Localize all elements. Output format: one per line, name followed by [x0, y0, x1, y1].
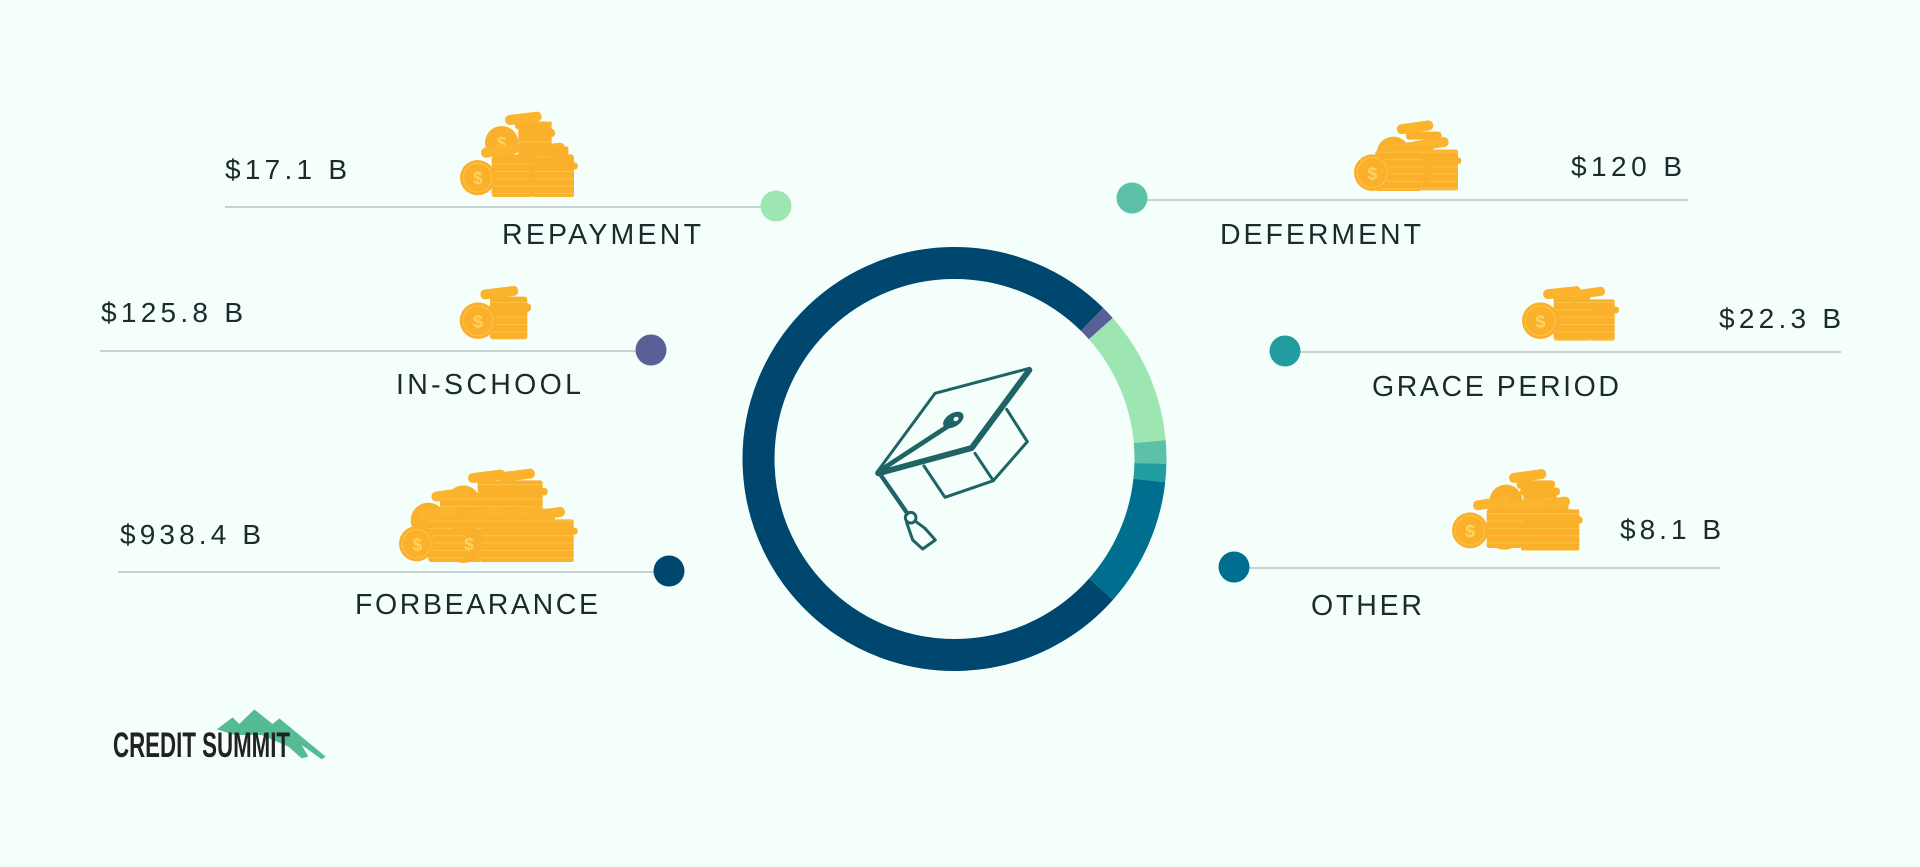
icon: deferment coins: [1354, 120, 1461, 191]
segment: deferment: [1134, 442, 1166, 463]
icon: grace period coins: $: [1535, 311, 1545, 331]
leader line: repayment: [225, 206, 762, 208]
icon: repayment coins: $: [473, 168, 483, 188]
icon: grace period coins: [1522, 286, 1619, 341]
wordmark: CREDIT SUMMIT: [113, 726, 290, 765]
icon: forbearance coins: $: [464, 534, 474, 554]
icon: forbearance coins: $: [413, 534, 423, 554]
value: forbearance: $938.4 B: [120, 519, 261, 550]
icon: deferment coins: $: [1367, 163, 1377, 183]
segment: forbearance: [759, 263, 1101, 655]
icon: in-school coins: $: [473, 311, 483, 331]
value: grace period: $22.3 B: [1719, 303, 1841, 334]
icon: other coins: [1452, 468, 1583, 551]
leader line: in-school: [100, 350, 637, 352]
segment: grace period: [1149, 463, 1150, 480]
segment: in-school: [1092, 319, 1101, 329]
icon: graduation cap: [877, 368, 1029, 549]
icon: repayment coins: $: [497, 133, 507, 152]
dot: grace period: [1270, 336, 1300, 366]
value: repayment: $17.1 B: [225, 154, 347, 185]
panel: other: [1218, 468, 1721, 622]
icon: mountain: [217, 709, 326, 759]
leader line: deferment: [1147, 199, 1688, 201]
dot: forbearance: [654, 556, 684, 586]
panel: in-school: [100, 285, 666, 401]
value: in-school: $125.8 B: [101, 297, 243, 328]
label: grace period: GRACE PERIOD: [1372, 371, 1619, 403]
dot: deferment: [1116, 182, 1148, 214]
logo: credit summit: [113, 709, 326, 765]
label: other: OTHER: [1311, 590, 1422, 622]
leader line: other: [1249, 567, 1720, 569]
icon: other coins: $: [1465, 521, 1475, 541]
label: deferment: DEFERMENT: [1220, 219, 1421, 251]
leader line: forbearance: [118, 571, 655, 573]
panel: repayment: [225, 111, 792, 251]
label: in-school: IN-SCHOOL: [396, 369, 581, 401]
icon: repayment coins: [460, 111, 578, 197]
leader line: grace period: [1300, 351, 1841, 353]
panel: grace period: [1270, 286, 1841, 403]
dot: in-school: [636, 334, 666, 366]
panel: deferment: [1116, 120, 1688, 251]
segment: other: [1101, 480, 1149, 589]
panel: forbearance: [118, 468, 684, 621]
icon: forbearance coins: [399, 468, 578, 563]
donut chart: [759, 263, 1150, 655]
dot: other: [1218, 552, 1250, 582]
label: forbearance: FORBEARANCE: [355, 589, 598, 621]
value: deferment: $120 B: [1571, 151, 1682, 182]
label: repayment: REPAYMENT: [502, 219, 701, 251]
icon: in-school coins: [460, 285, 531, 339]
value: other: $8.1 B: [1620, 514, 1721, 545]
segment: repayment: [1101, 329, 1150, 442]
dot: repayment: [760, 190, 792, 222]
